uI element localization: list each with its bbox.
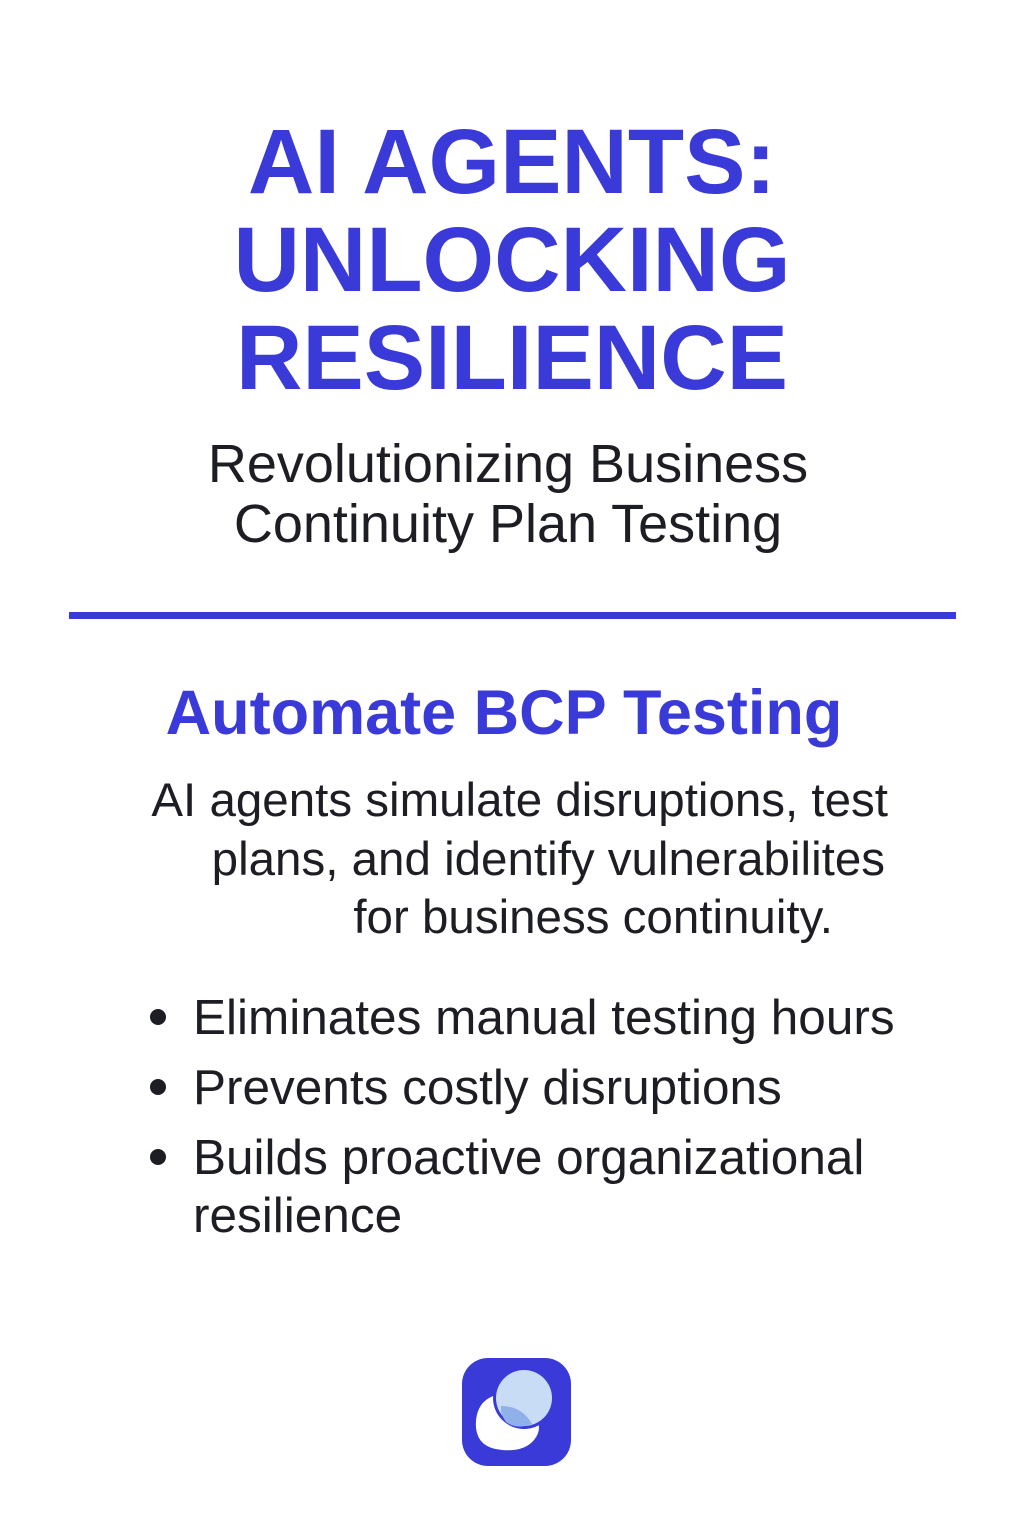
title: AI AGENTS:: [248, 111, 776, 213]
description: [151, 774, 888, 944]
bullet list: [150, 990, 895, 1243]
title: RESILIENCE: [236, 307, 788, 409]
bullet 2: Prevents costly disruptions: [193, 1060, 782, 1115]
description: AI agents simulate disruptions, test: [151, 774, 888, 827]
description: for business continuity.: [353, 891, 833, 944]
title: UNLOCKING: [233, 209, 791, 311]
subtitle: [208, 434, 808, 554]
description: plans, and identify vulnerabilites: [212, 833, 885, 886]
subtitle: Continuity Plan Testing: [234, 494, 782, 554]
divider: [69, 612, 956, 619]
title: [233, 111, 791, 409]
bullet 3: Builds proactive organizational: [193, 1130, 864, 1185]
icon: logo: [462, 1358, 571, 1466]
bullet 3: resilience: [193, 1188, 402, 1243]
bullet 3: [150, 1130, 864, 1243]
bullet 1: Eliminates manual testing hours: [193, 990, 895, 1045]
heading: Automate BCP Testing: [166, 678, 842, 748]
subtitle: Revolutionizing Business: [208, 434, 808, 494]
